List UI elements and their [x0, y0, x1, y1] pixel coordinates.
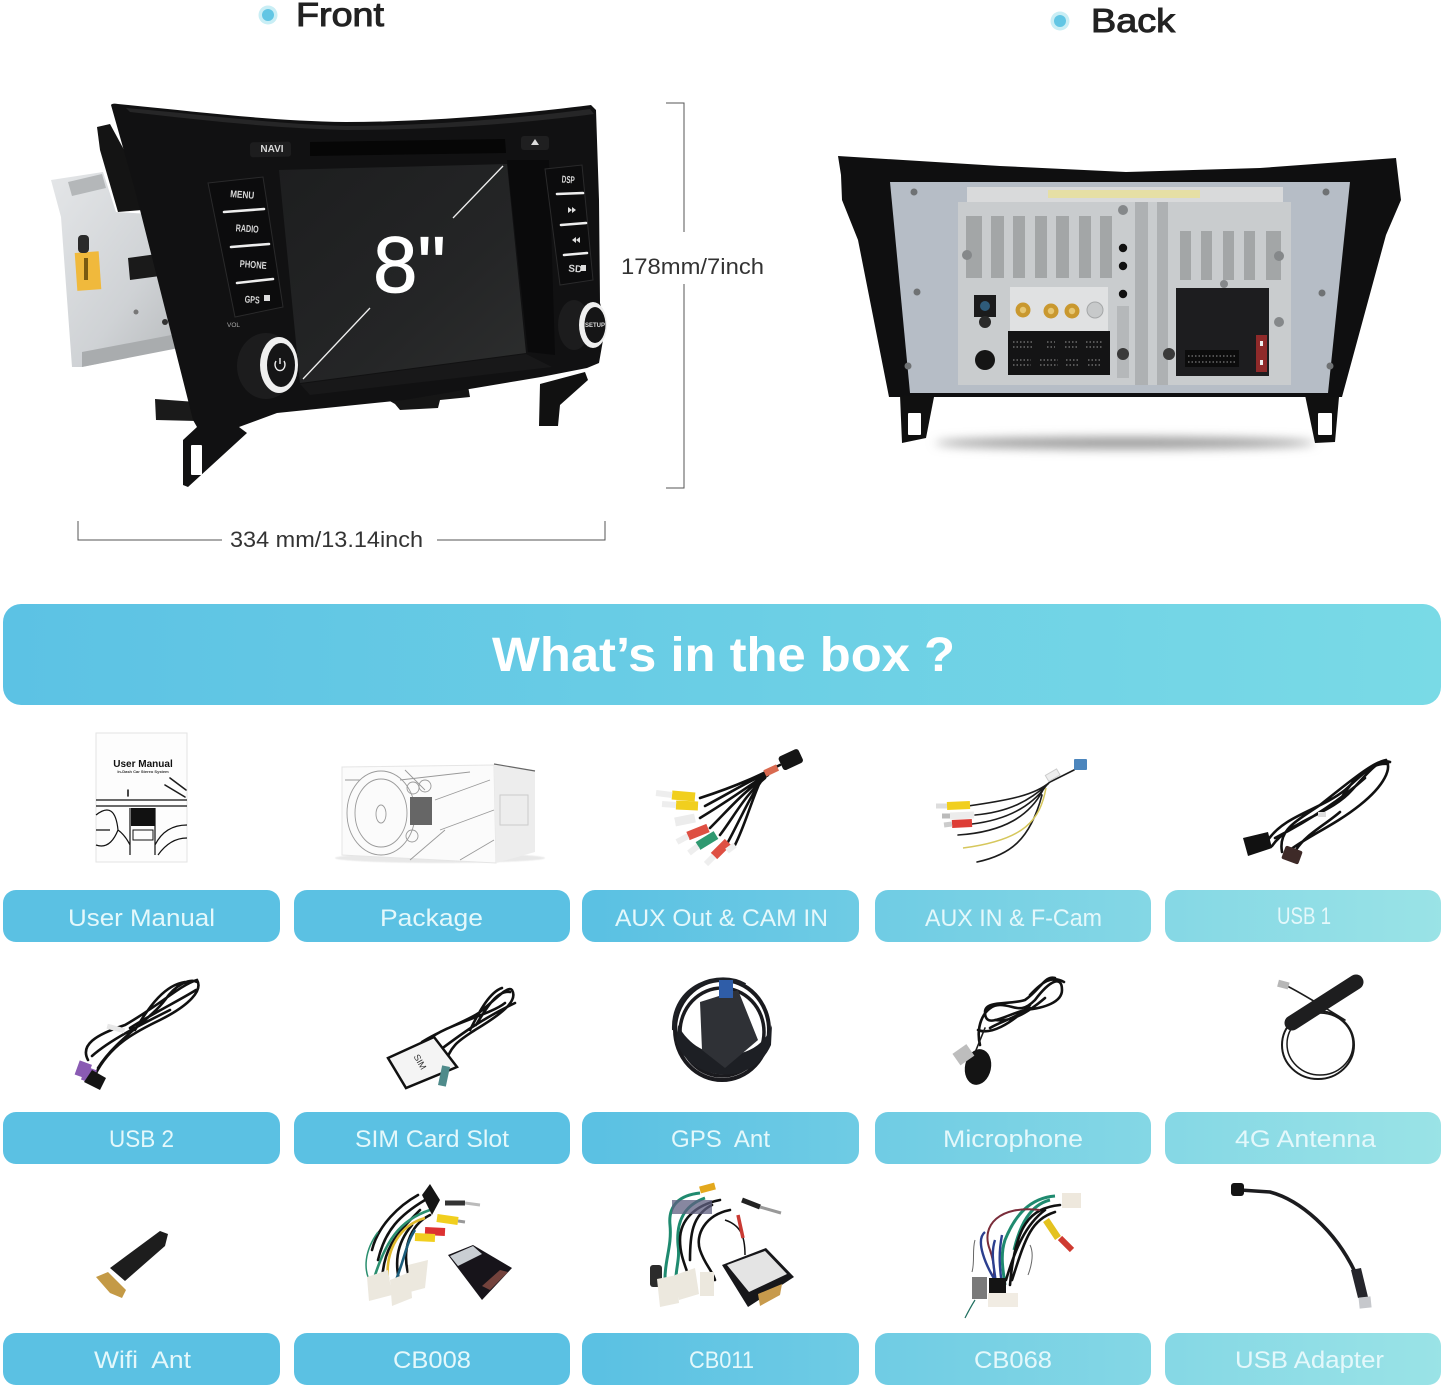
item: USB 1 [1165, 760, 1441, 942]
label: USB Adapter [1235, 1347, 1384, 1374]
label: AUX IN & F-Cam [925, 905, 1102, 932]
label: CB068 [974, 1347, 1052, 1374]
label [294, 1333, 570, 1385]
left vents [966, 216, 1112, 278]
setup knob: SETUP [585, 323, 605, 329]
width dimension: 334 mm/13.14inch: 334 mm/13.14inch [230, 527, 423, 552]
item: USB Adapter [1165, 1183, 1441, 1385]
icon: microphone [952, 978, 1064, 1087]
item: User Manual [3, 733, 280, 942]
size annotation: 8 inch: 8" [373, 220, 446, 309]
height dimension: 178mm/7inch: 178mm/7inch [621, 254, 764, 279]
label: 4G Antenna [1235, 1126, 1377, 1153]
item: Wifi Ant [3, 1231, 280, 1385]
icon: CB008 harness and box [366, 1184, 512, 1306]
label [1165, 1112, 1441, 1164]
volume knob [227, 322, 298, 399]
right wire connector block [1176, 288, 1269, 376]
screen [279, 164, 526, 383]
right vents [1180, 231, 1281, 280]
feet [900, 395, 1339, 443]
label [3, 890, 280, 942]
metal chassis [51, 172, 190, 367]
heading: Back [1050, 2, 1176, 39]
gloss front bezel [111, 104, 606, 487]
NAVI button [250, 142, 291, 157]
height dimension: 178mm/7inch [621, 103, 764, 488]
icon: USB 2 cable [75, 980, 198, 1090]
back view of stereo unit [838, 156, 1401, 449]
rear mount tabs [97, 124, 470, 421]
foot slot [191, 445, 202, 475]
size annotation: 8 inch [303, 166, 503, 379]
label [1165, 1333, 1441, 1385]
heading: Back: Back [1091, 2, 1176, 39]
item: Package [294, 764, 570, 942]
label [875, 1333, 1151, 1385]
camera port [974, 295, 996, 328]
volume knob: VOL [227, 322, 240, 329]
item: CB068 [875, 1193, 1151, 1385]
item: CB011 [582, 1186, 859, 1385]
icon: wifi antenna [96, 1231, 168, 1298]
front view of stereo unit [51, 104, 607, 487]
label: Package [380, 905, 483, 932]
label [875, 1112, 1151, 1164]
floor shadow [935, 437, 1315, 449]
antenna connector panel [1010, 287, 1108, 331]
label [3, 1112, 280, 1164]
item: CB008 [294, 1184, 570, 1385]
icon: manual booklet [96, 733, 187, 862]
right button panel [545, 165, 593, 285]
grey mount plate [890, 182, 1350, 393]
icon: manual booklet: In-Dash Car Stereo System [117, 769, 169, 774]
metal box [967, 187, 1283, 203]
bottom right bracket [539, 372, 588, 426]
label: AUX Out & CAM IN [615, 905, 828, 932]
label: USB 2 [109, 1126, 174, 1153]
label: SIM Card Slot [355, 1126, 509, 1153]
banner: What's in the box: What’s in the box ? [492, 629, 955, 682]
disc slot and eject [310, 136, 549, 156]
item: GPS Ant [582, 979, 859, 1164]
width dimension: 334 mm/13.14inch [78, 521, 605, 552]
icon: AUX cable [936, 759, 1087, 862]
item: Microphone [875, 978, 1151, 1164]
icon: RCA harness [656, 748, 804, 864]
label: Microphone [943, 1126, 1083, 1153]
icon: USB adapter cable [1231, 1183, 1372, 1309]
icon: SIM card cable: SIM [412, 1053, 428, 1071]
right button panel: DSP [561, 175, 575, 186]
left button panel: RADIO [235, 223, 259, 236]
label: User Manual [68, 905, 215, 932]
icon: CB068 harness [965, 1193, 1081, 1318]
item: USB 2 [3, 980, 280, 1164]
round port [975, 350, 995, 370]
label [582, 890, 859, 942]
banner: What's in the box [3, 604, 1441, 705]
icon: USB 1 cable [1243, 760, 1390, 865]
label [294, 890, 570, 942]
left button panel: GPS [244, 294, 260, 307]
label: USB 1 [1277, 903, 1331, 930]
item: 4G Antenna [1165, 980, 1441, 1164]
NAVI button: NAVI [260, 144, 284, 155]
icon: 4G antenna [1277, 980, 1356, 1079]
label: CB008 [393, 1347, 471, 1374]
left wire connector block [1008, 331, 1110, 375]
label [294, 1112, 570, 1164]
label: CB011 [689, 1347, 754, 1374]
icon: CB011 harness and box [650, 1186, 794, 1307]
label [582, 1333, 859, 1385]
icon: box [335, 764, 545, 863]
heading: Front [258, 0, 384, 33]
label: Wifi Ant [94, 1347, 191, 1374]
label [875, 890, 1151, 942]
item: SIM Card Slot [294, 988, 570, 1164]
item: AUX Out and CAM IN [582, 748, 859, 942]
right button panel: SD [568, 264, 582, 275]
label [1165, 890, 1441, 942]
left button panel: PHONE [239, 259, 267, 272]
left button panel [208, 177, 283, 317]
icon: SIM card cable [388, 988, 515, 1088]
left button panel: MENU [230, 189, 255, 202]
label: GPS Ant [671, 1126, 770, 1153]
black frame [838, 156, 1401, 397]
center rails [962, 202, 1284, 385]
icon: manual booklet: User Manual [113, 759, 173, 770]
plate screws [904, 188, 1334, 370]
label [582, 1112, 859, 1164]
label [3, 1333, 280, 1385]
icon: GPS antenna coil [674, 979, 772, 1080]
setup knob [558, 300, 607, 350]
item: AUX IN and F-Cam [875, 759, 1151, 942]
